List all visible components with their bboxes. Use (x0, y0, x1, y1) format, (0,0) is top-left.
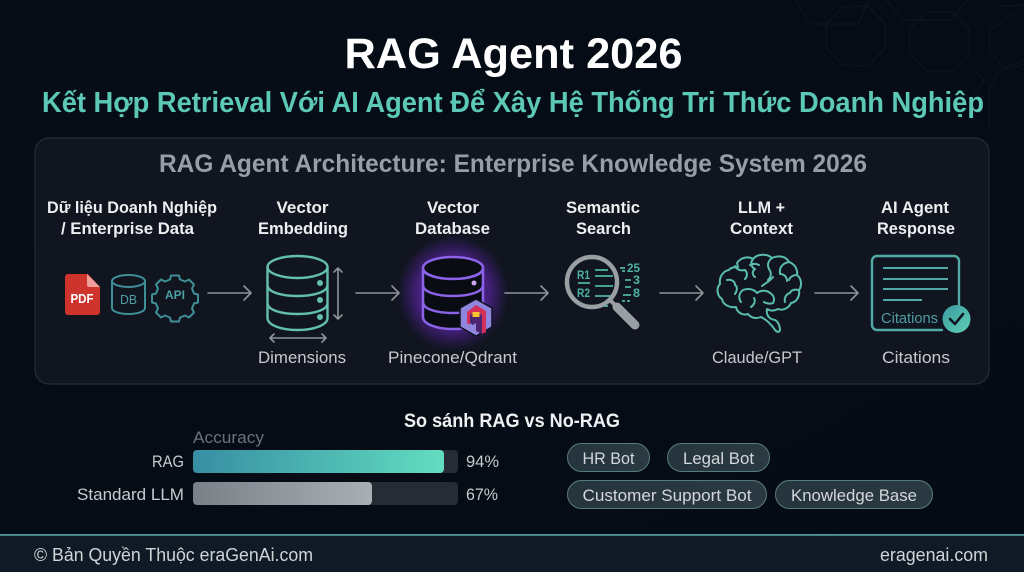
bar: RAG 94%: 94% (466, 452, 499, 471)
step heading: agent response: AI Agent (881, 198, 949, 217)
subtitle: Kết Hợp Retrieval Với AI Agent Để Xây Hệ Thống Tri Thức Doanh Nghiệp (42, 87, 984, 119)
step heading: llm + context: LLM + (738, 198, 785, 217)
chip: Knowledge Base (776, 480, 932, 508)
copyright: © Bản Quyền Thuộc eraGenAi.com (34, 545, 313, 565)
chip: HR Bot: HR Bot (582, 449, 635, 468)
bar chart: accuracy (77, 428, 499, 505)
comparison heading: So sánh RAG vs No-RAG (404, 411, 620, 432)
bar: RAG 94%: RAG (152, 452, 184, 471)
icon: magnifier with results: 25 (627, 261, 640, 275)
step heading: vector embedding: Vector (276, 198, 329, 217)
chip: HR Bot (568, 444, 650, 472)
step heading: llm + context (730, 198, 793, 238)
icon: magnifier with results: R2 (577, 286, 590, 300)
icon: magnifier with results: 3 (633, 273, 640, 287)
icon: magnifier with results (567, 257, 640, 325)
title: RAG Agent 2026 (344, 30, 682, 78)
icon: dimension arrows (270, 268, 342, 342)
icon: database DB: DB (120, 292, 137, 307)
arrow (208, 286, 251, 300)
icon: PDF file (65, 274, 100, 315)
icon: response document with citations (872, 256, 970, 333)
chip: Legal Bot (668, 444, 770, 472)
icon: magnifier with results: R1 (577, 268, 590, 282)
icon: PDF file: PDF (70, 292, 94, 306)
step heading: llm + context: Context (730, 219, 793, 238)
step heading: enterprise data (47, 198, 217, 238)
chip: Customer Support Bot (568, 480, 766, 508)
step heading: enterprise data: / Enterprise Data (61, 219, 195, 238)
icon: response document with citations: Citations (881, 310, 938, 327)
icon: API gear (152, 276, 198, 322)
bar: Standard LLM 67%: 67% (466, 485, 498, 504)
step heading: semantic search (566, 198, 640, 238)
footer (0, 534, 1024, 572)
use-case chips (568, 444, 932, 508)
step heading: agent response: Response (877, 219, 955, 238)
step heading: vector database: Vector (427, 198, 479, 217)
label: pinecone/qdrant: Pinecone/Qdrant (388, 348, 517, 367)
step heading: enterprise data: Dữ liệu Doanh Nghiệp (47, 198, 217, 217)
chip: Customer Support Bot: Customer Support Bot (582, 486, 752, 505)
axis label: Accuracy (193, 428, 264, 447)
icon: embedding cylinder (268, 256, 328, 330)
step heading: vector embedding (258, 198, 348, 238)
arrow (505, 286, 548, 300)
website: eragenai.com (880, 545, 988, 565)
arrow (815, 286, 858, 300)
bar: Standard LLM 67% (77, 482, 498, 505)
step heading: vector database (415, 198, 490, 238)
arrow (356, 286, 399, 300)
icon: API gear: API (165, 288, 185, 302)
step heading: vector embedding: Embedding (258, 219, 348, 238)
icon: brain (718, 255, 801, 332)
step heading: agent response (877, 198, 955, 238)
icon: database DB (112, 275, 145, 314)
bar: RAG 94% (152, 450, 499, 473)
label: dimensions: Dimensions (258, 348, 346, 367)
label: claude/gpt: Claude/GPT (712, 348, 802, 367)
icon: qdrant badge (460, 299, 492, 336)
step heading: semantic search: Search (576, 219, 631, 238)
arrow (660, 286, 703, 300)
chip: Knowledge Base: Knowledge Base (791, 486, 917, 505)
step heading: vector database: Database (415, 219, 490, 238)
bar: Standard LLM 67%: Standard LLM (77, 485, 184, 504)
icon: magnifier with results: 8 (633, 286, 640, 300)
step heading: semantic search: Semantic (566, 198, 640, 217)
panel heading: RAG Agent Architecture: Enterprise Knowledge System 2026 (159, 150, 867, 178)
icon: glowing vector database (397, 235, 509, 351)
chip: Legal Bot: Legal Bot (683, 449, 754, 468)
label: citations: Citations (882, 348, 950, 367)
panel: architecture pipeline (35, 138, 989, 384)
